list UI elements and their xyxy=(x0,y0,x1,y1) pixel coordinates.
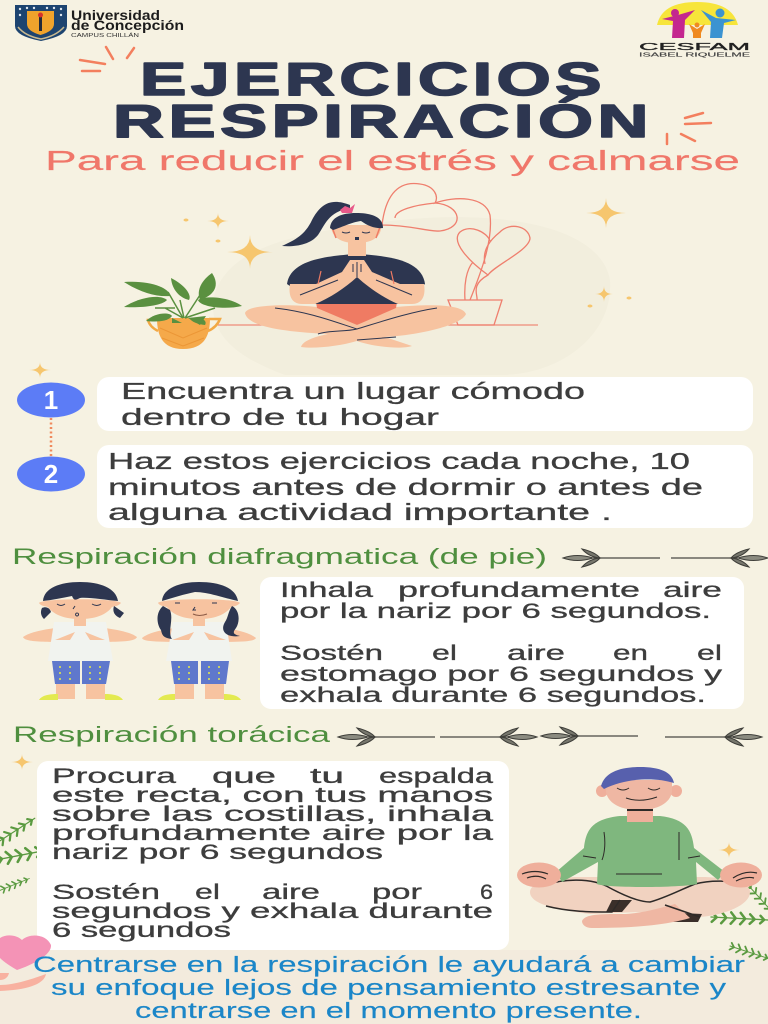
woman xyxy=(245,202,466,348)
panel: diaphragmatic instructions: profundamente xyxy=(398,579,640,602)
panel: thoracic instructions: espalda xyxy=(379,765,493,788)
panel: thoracic instructions: que xyxy=(212,765,276,788)
panel: thoracic instructions: este recta, con tus manos xyxy=(52,784,493,807)
logo: Universidad de Concepción xyxy=(15,5,184,41)
step 2 xyxy=(17,445,753,528)
panel: diaphragmatic instructions xyxy=(260,577,744,709)
panel: thoracic instructions: sobre las costillas, inhala xyxy=(52,803,494,826)
heading: thoracic breathing: Respiración torácica xyxy=(13,722,331,747)
accent strokes right xyxy=(667,113,711,144)
step 2: minutos antes de dormir o antes de xyxy=(108,474,703,500)
title: EJERCICIOS xyxy=(140,53,606,105)
panel: thoracic instructions: el xyxy=(195,881,220,904)
illustration: meditating man xyxy=(517,767,762,928)
closing message xyxy=(33,952,745,1023)
panel: thoracic instructions: segundos y exhala durante xyxy=(52,900,493,923)
panel: diaphragmatic instructions: Inhala xyxy=(280,579,374,602)
closing message: centrarse en el momento presente. xyxy=(135,998,642,1023)
panel: diaphragmatic instructions: en xyxy=(613,642,648,665)
sparkle near step 1 xyxy=(29,362,51,378)
panel: thoracic instructions: 6 segundos xyxy=(52,919,231,942)
illustration: meditating woman with plants xyxy=(124,183,632,375)
panel: thoracic instructions xyxy=(37,761,509,950)
panel: thoracic instructions: Procura xyxy=(52,765,177,788)
accent strokes top left xyxy=(80,47,134,71)
panel: diaphragmatic instructions: por la nariz por 6 segundos. xyxy=(280,600,711,623)
step 1: 1 xyxy=(44,385,58,415)
panel: thoracic instructions: Sostén xyxy=(52,881,160,904)
ornament arrows 2 xyxy=(338,727,762,746)
panel: diaphragmatic instructions: aire xyxy=(507,642,565,665)
logo: Universidad de Concepción: de Concepción xyxy=(71,17,184,33)
subtitle: Para reducir el estrés y calmarse xyxy=(45,145,740,176)
bottom band xyxy=(0,950,768,1024)
panel: diaphragmatic instructions: exhala durante 6 segundos. xyxy=(280,684,706,707)
panel: thoracic instructions: 6 xyxy=(480,881,493,904)
logo: CESFAM: ISABEL RIQUELME xyxy=(639,52,751,58)
potted plant xyxy=(124,273,242,349)
heading: diaphragmatic breathing: Respiración diafragmatica (de pie) xyxy=(12,544,547,569)
step 1 xyxy=(17,377,753,431)
title xyxy=(113,53,653,147)
panel: thoracic instructions: tu xyxy=(310,765,344,788)
ferns left xyxy=(0,814,56,895)
step 2: 2 xyxy=(44,459,58,489)
logo: Universidad de Concepción: CAMPUS CHILLÁN xyxy=(71,32,139,39)
closing message: Centrarse en la respiración le ayudará a cambiar xyxy=(33,952,745,977)
panel: diaphragmatic instructions: el xyxy=(432,642,457,665)
step 1: Encuentra un lugar cómodo xyxy=(121,378,585,404)
step 1: dentro de tu hogar xyxy=(121,404,440,430)
step 2: alguna actividad importante . xyxy=(108,499,612,525)
ferns right xyxy=(711,882,768,963)
heart plant xyxy=(382,183,530,325)
logo: CESFAM xyxy=(639,2,751,58)
panel: diaphragmatic instructions: aire xyxy=(663,579,722,602)
panel: diaphragmatic instructions: Sostén xyxy=(280,642,383,665)
panel: thoracic instructions: por xyxy=(372,881,422,904)
panel: thoracic instructions: aire xyxy=(262,881,320,904)
sparkles xyxy=(184,198,632,308)
ornament arrows 1 xyxy=(563,549,768,567)
sparkle left xyxy=(11,754,33,770)
panel: thoracic instructions: nariz por 6 segundos xyxy=(52,841,383,864)
panel: thoracic instructions: profundamente aire por la xyxy=(52,822,494,845)
icon: heart in hand xyxy=(0,935,51,991)
title: RESPIRACIÓN xyxy=(113,95,653,147)
closing message: su enfoque lejos de pensamiento estresante y xyxy=(51,975,726,1000)
illustration: girl exhaling xyxy=(142,582,256,700)
panel: diaphragmatic instructions: el xyxy=(697,642,722,665)
illustration: girl inhaling xyxy=(23,582,137,700)
logo: Universidad de Concepción: Universidad xyxy=(71,7,160,23)
step connector xyxy=(50,418,52,456)
step 2: Haz estos ejercicios cada noche, 10 xyxy=(108,448,690,474)
panel: diaphragmatic instructions: estomago por 6 segundos y xyxy=(280,663,723,686)
logo: CESFAM: CESFAM xyxy=(639,42,750,53)
